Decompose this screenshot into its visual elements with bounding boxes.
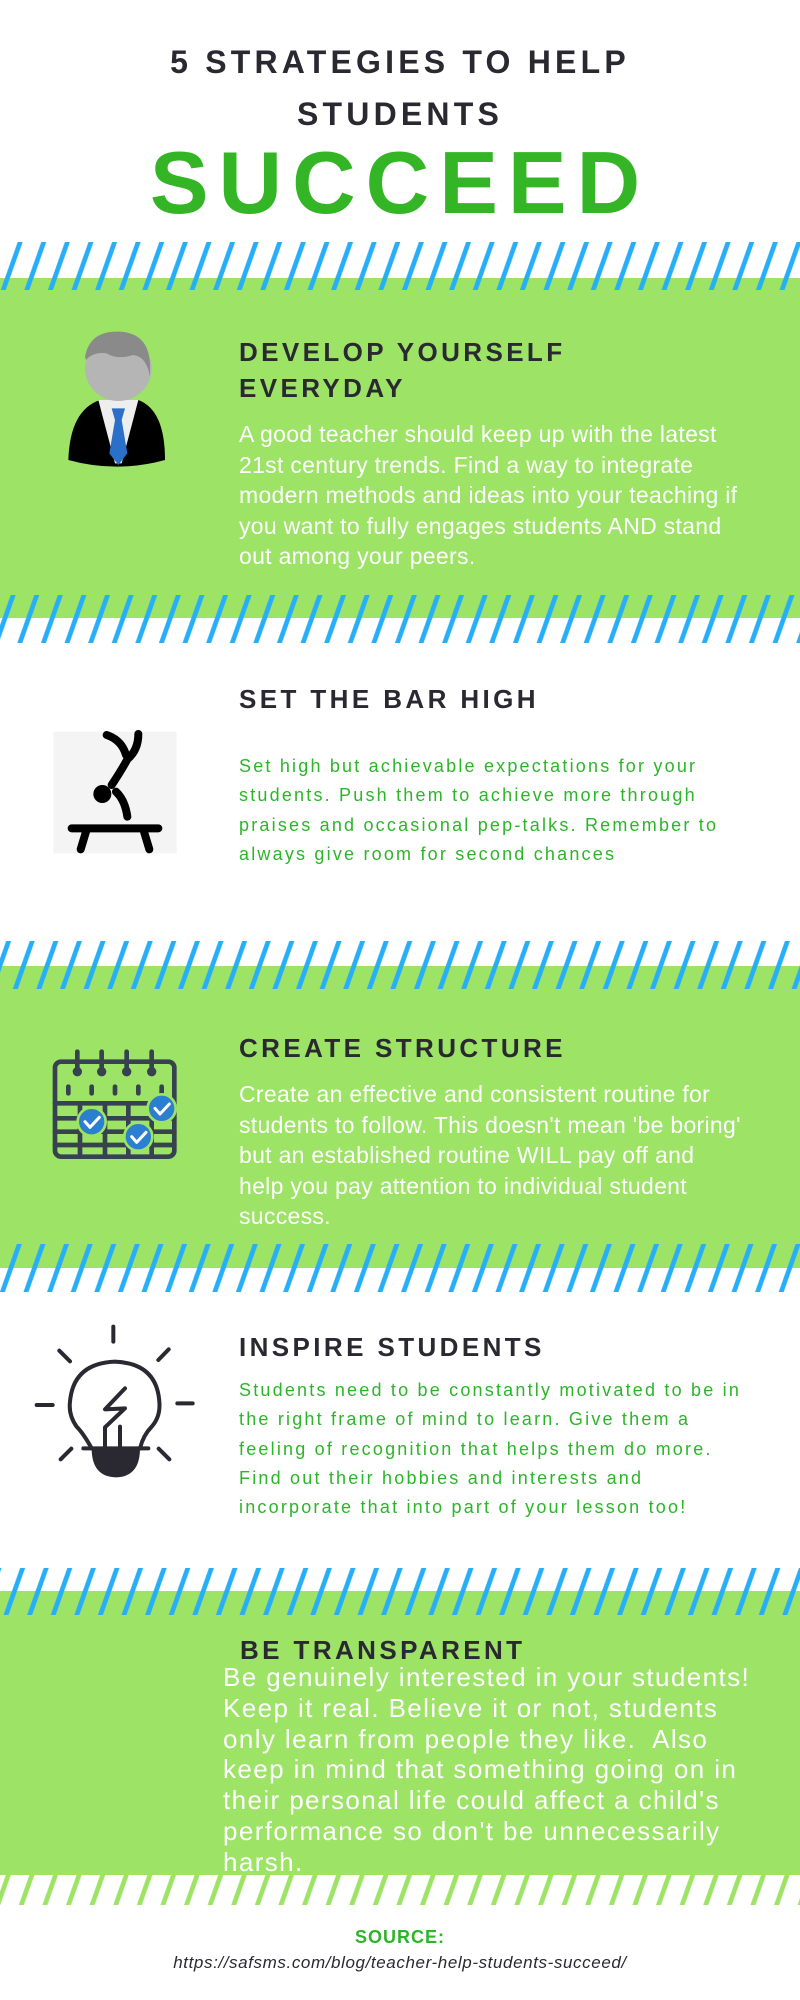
text: be transparent — [223, 1662, 750, 1875]
text: create structure — [239, 1081, 741, 1229]
text: develop yourself: you want to fully engages students AND stand — [239, 512, 721, 538]
icon: gymnast — [54, 730, 176, 854]
text: set the bar high: students. Push them to achieve more through — [239, 785, 697, 805]
text: inspire students: Find out their hobbies and interests and — [239, 1468, 643, 1488]
text: develop yourself — [239, 421, 738, 569]
text: develop yourself: A good teacher should keep up with the latest — [239, 421, 717, 447]
source — [173, 1927, 628, 1972]
text: set the bar high: Set high but achievable expectations for your — [239, 756, 697, 776]
text: be transparent: Be genuinely interested in your students! — [223, 1662, 750, 1692]
text: create structure: but an established routine WILL pay off and — [239, 1142, 694, 1168]
text: set the bar high: always give room for second chances — [239, 844, 616, 864]
text: inspire students: Students need to be constantly motivated to be in — [239, 1380, 741, 1400]
heading: develop yourself: DEVELOP YOURSELF — [239, 337, 566, 367]
title: STUDENTS — [297, 96, 503, 132]
text: develop yourself: out among your peers. — [239, 543, 475, 569]
text: be transparent: their personal life could affect a child's — [223, 1785, 720, 1815]
icon: calendar — [52, 1049, 177, 1159]
text: be transparent: keep in mind that something going on in — [223, 1754, 737, 1784]
text: inspire students: incorporate that into part of your lesson too! — [239, 1497, 687, 1517]
heading: create structure: CREATE STRUCTURE — [239, 1033, 566, 1063]
source: https://safsms.com/blog/teacher-help-students-succeed/ — [173, 1953, 627, 1972]
title: succeed: SUCCEED — [150, 133, 650, 232]
text: develop yourself: modern methods and ideas into your teaching if — [239, 482, 737, 508]
text: create structure: success. — [239, 1203, 331, 1229]
text: inspire students: the right frame of mind to learn. Give them a — [239, 1409, 690, 1429]
text: develop yourself: 21st century trends. Find a way to integrate — [239, 452, 693, 478]
text: create structure: students to follow. This doesn't mean 'be boring' — [239, 1112, 741, 1138]
icon: teacher — [68, 332, 165, 467]
text: create structure: help you pay attention to individual student — [239, 1172, 687, 1198]
heading: develop yourself: EVERYDAY — [239, 373, 406, 403]
text: inspire students — [239, 1380, 741, 1517]
text: set the bar high — [239, 756, 718, 864]
heading: inspire students: INSPIRE STUDENTS — [239, 1332, 545, 1362]
text: be transparent: only learn from people they like. Also — [223, 1724, 708, 1754]
text: inspire students: feeling of recognition that helps them do more. — [239, 1439, 713, 1459]
icon: light bulb — [34, 1324, 195, 1478]
text: be transparent: performance so don't be unnecessarily — [223, 1816, 721, 1846]
title: 5 STRATEGIES TO HELP — [170, 44, 630, 80]
source: SOURCE: — [355, 1927, 445, 1947]
text: create structure: Create an effective and consistent routine for — [239, 1081, 710, 1107]
title — [170, 44, 630, 132]
heading: develop yourself — [239, 337, 566, 403]
text: be transparent: Keep it real. Believe it or not, students — [223, 1693, 718, 1723]
text: set the bar high: praises and occasional pep-talks. Remember to — [239, 815, 718, 835]
heading: be transparent: BE TRANSPARENT — [240, 1635, 525, 1665]
heading: set the bar high: SET THE BAR HIGH — [239, 684, 539, 714]
